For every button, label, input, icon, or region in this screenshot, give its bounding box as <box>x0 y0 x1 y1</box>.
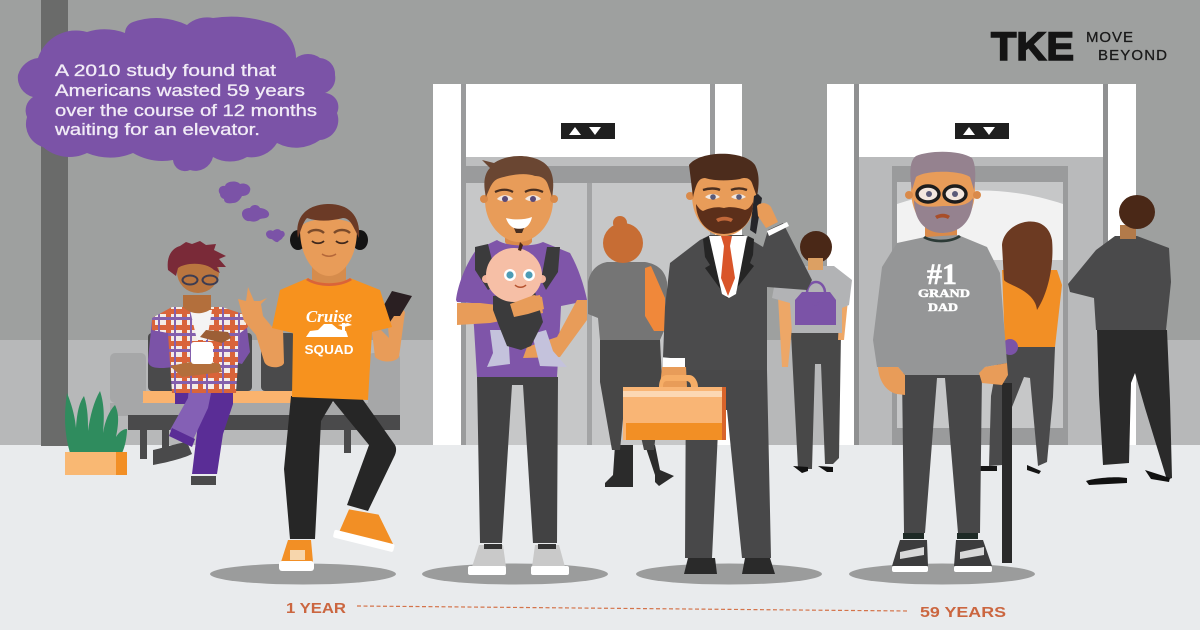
floor shadow four <box>849 564 1035 584</box>
elevator right <box>827 84 1136 445</box>
shirt print: #1 <box>927 258 957 291</box>
white shirt <box>709 236 747 298</box>
right arm <box>523 300 587 358</box>
standing shoe <box>279 540 314 571</box>
sweatshirt <box>873 235 1007 375</box>
floor shadow one <box>210 564 396 584</box>
right shoe <box>531 544 569 575</box>
logo tagline: BEYOND <box>1098 47 1167 64</box>
neck <box>925 225 957 243</box>
floor <box>0 445 1200 630</box>
background woman with long hair <box>980 221 1062 474</box>
logo tagline <box>1086 29 1167 64</box>
baby legs <box>487 330 567 367</box>
businessman with briefcase <box>623 154 822 584</box>
carrier straps <box>475 244 560 290</box>
plant pot <box>65 452 127 475</box>
hair <box>482 156 553 197</box>
briefcase <box>623 375 726 440</box>
elevator left <box>433 84 742 445</box>
eyes <box>495 190 543 202</box>
raised shoe <box>333 505 401 552</box>
small thought clouds <box>219 182 285 242</box>
wall background <box>0 0 1200 446</box>
head <box>692 160 756 236</box>
timeline <box>286 601 1006 621</box>
left shoe <box>468 544 506 575</box>
suit jacket <box>663 223 812 370</box>
glasses <box>917 186 966 202</box>
bubble text: A 2010 study found that <box>55 62 277 80</box>
orange shirt <box>272 278 392 400</box>
bubble text: over the course of 12 months <box>55 102 317 120</box>
grey hair <box>910 152 975 190</box>
floor indicator right <box>955 123 1009 139</box>
right sneaker <box>954 533 992 572</box>
goatee <box>514 228 524 233</box>
trousers <box>685 370 771 558</box>
plant <box>65 391 127 475</box>
shirt print: GRAND <box>918 288 970 300</box>
background man in dark shirt <box>1068 195 1172 485</box>
shirt cuff <box>767 222 789 236</box>
bubble text: Americans wasted 59 years <box>55 82 305 100</box>
grey beard <box>914 198 973 233</box>
phone and hand <box>750 194 778 234</box>
closed eyes and mouth <box>308 230 350 256</box>
neck <box>505 220 532 248</box>
eyes <box>703 188 747 200</box>
timeline dashed line <box>357 606 908 611</box>
left arm <box>457 295 543 325</box>
head <box>485 160 553 242</box>
bubble text <box>54 62 317 139</box>
head <box>300 219 357 276</box>
timeline end label: 59 YEARS <box>920 605 1006 621</box>
smile <box>506 217 532 229</box>
shirt print: SQUAD <box>304 342 354 357</box>
beard <box>696 202 753 234</box>
hair <box>297 204 359 238</box>
hand <box>660 367 687 387</box>
tie <box>721 236 735 296</box>
shirt print: DAD <box>928 302 958 314</box>
plant leaves <box>65 391 127 453</box>
backpack <box>795 282 836 325</box>
cuff <box>663 358 685 367</box>
shoes <box>684 558 775 574</box>
thought bubble with study text <box>18 17 338 171</box>
floor shadow two <box>422 564 608 584</box>
carrier <box>493 292 543 350</box>
background person with backpack <box>772 231 852 473</box>
logo tagline: MOVE <box>1086 29 1133 46</box>
stanchion post <box>1002 383 1012 563</box>
lapels <box>703 236 737 298</box>
shirt print <box>918 258 970 314</box>
left sneaker <box>892 533 928 572</box>
bench <box>110 333 400 459</box>
man with orange shirt and headphones <box>210 204 412 584</box>
head <box>911 155 975 233</box>
purple shirt <box>456 240 587 377</box>
trousers <box>902 373 982 533</box>
arms <box>238 287 405 367</box>
hair <box>689 154 759 197</box>
shirt print: Cruise <box>306 307 353 326</box>
hands <box>878 363 1008 395</box>
sitting man with plaid shirt <box>148 241 250 485</box>
wall column <box>41 0 68 446</box>
shirt print <box>304 307 354 357</box>
hand on baby <box>510 295 544 317</box>
grandfather in sweatshirt <box>849 152 1035 584</box>
baby head <box>482 242 546 302</box>
floor shadow three <box>636 564 822 584</box>
background woman with orange bag <box>588 216 674 487</box>
logo <box>991 25 1167 69</box>
trousers <box>477 377 558 543</box>
dad with baby carrier <box>422 156 608 584</box>
neck <box>312 255 346 286</box>
phone <box>380 291 412 322</box>
headphones <box>290 230 368 250</box>
timeline start label: 1 YEAR <box>286 601 347 617</box>
logo mark: TKE <box>991 25 1074 69</box>
floor indicator left <box>561 123 615 139</box>
glasses <box>182 276 218 284</box>
bubble text: waiting for an elevator. <box>54 121 260 139</box>
trousers <box>284 396 396 539</box>
